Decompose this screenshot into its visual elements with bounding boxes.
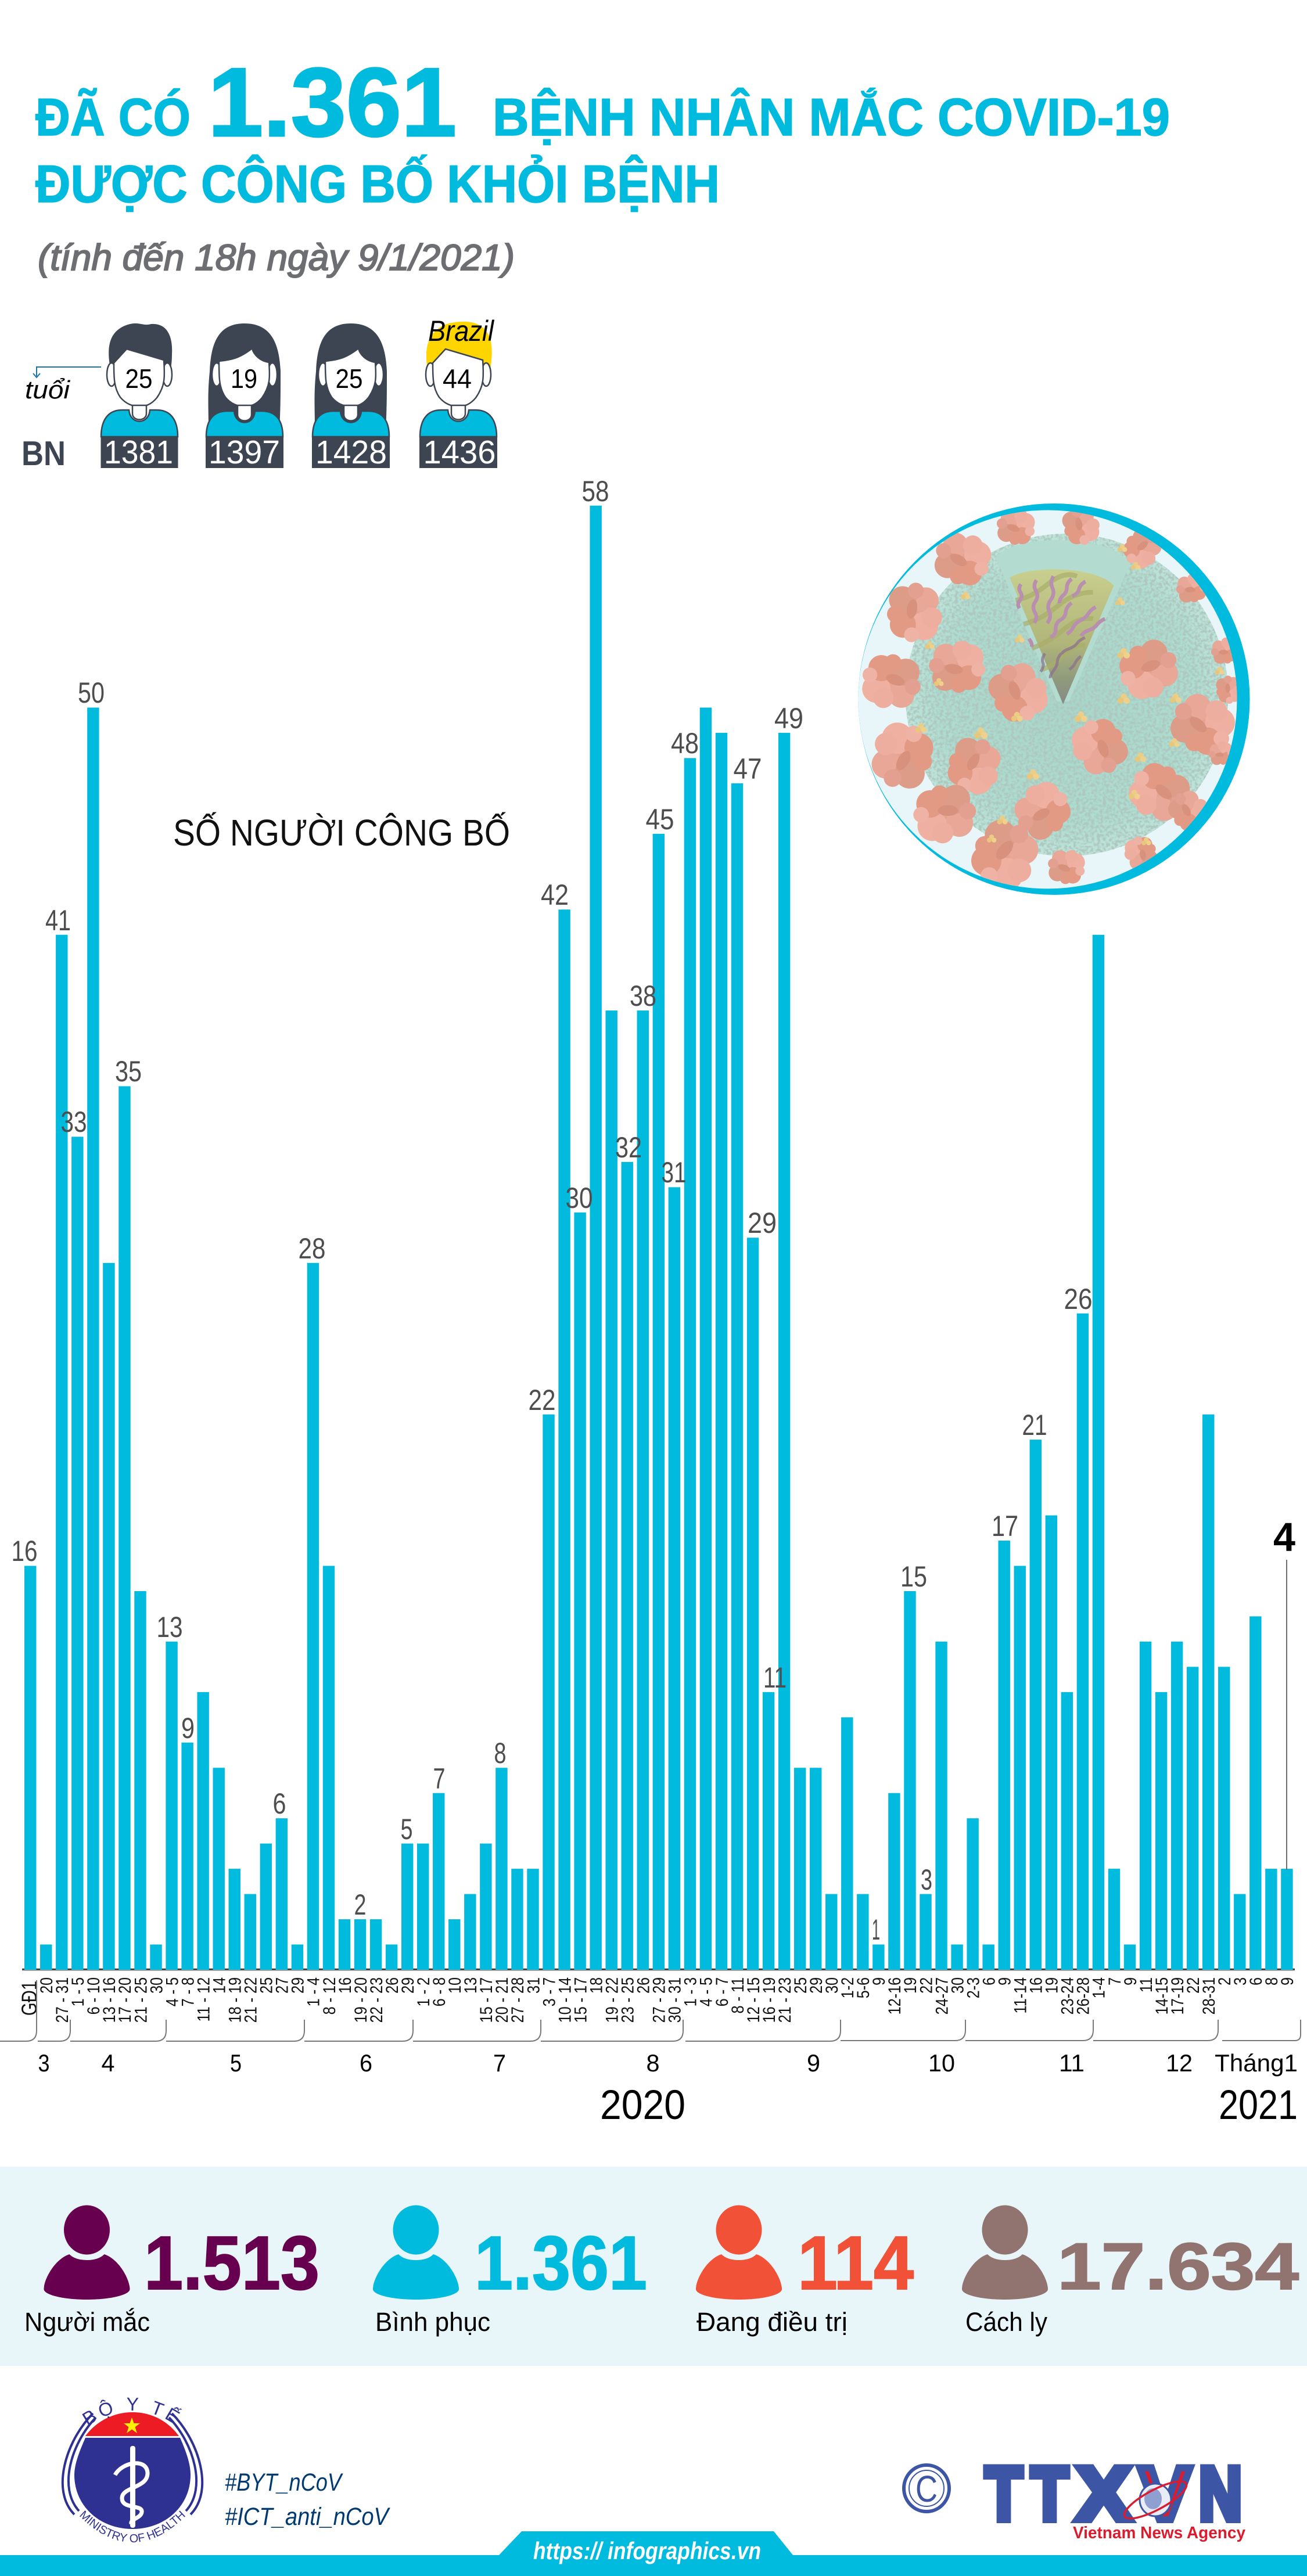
date tick labels: GĐ1 — [18, 1981, 42, 2016]
patient 1428: 25 — [336, 364, 362, 394]
month labels: 12 — [1166, 2049, 1193, 2077]
logo: TTXVN: T — [985, 2451, 1022, 2536]
logo: Bộ Y tế: MINISTRY OF HEALTH — [80, 2510, 185, 2542]
chart heading: SỐ NGƯỜI CÔNG BỐ — [173, 812, 510, 854]
hashtags: #BYT_nCoV — [225, 2469, 344, 2496]
date tick labels: 24-27 — [932, 1977, 951, 2014]
date tick labels: 21 - 22 — [241, 1977, 260, 2023]
date tick labels: 14-15 — [1152, 1977, 1171, 2014]
value labels: 31 — [661, 1156, 687, 1189]
stat: đang điều trị: 114 — [798, 2220, 914, 2305]
label: tuổi with arrow: tuổi — [25, 376, 70, 404]
date tick labels: 30 — [146, 1977, 166, 1994]
month labels: 10 — [928, 2049, 955, 2077]
date tick labels: 21 - 23 — [775, 1977, 794, 2023]
stat: bình phục: 1.361 — [475, 2220, 647, 2305]
date tick labels: 19 - 22 — [602, 1977, 622, 2023]
date tick labels: 26-28 — [1073, 1977, 1093, 2014]
month labels: 11 — [1059, 2049, 1085, 2077]
value labels: 33 — [60, 1106, 87, 1138]
date tick labels: 6 - 10 — [84, 1977, 103, 2014]
month labels: 7 — [493, 2049, 506, 2077]
date tick labels: 22 — [1183, 1977, 1202, 1994]
patient 1381: 25 — [125, 364, 152, 394]
date tick labels: 27 - 31 — [52, 1977, 72, 2023]
date tick labels: 8 - 12 — [319, 1977, 339, 2014]
bar chart — [0, 475, 1301, 2128]
value labels: 28 — [299, 1232, 325, 1265]
virus illustration — [854, 503, 1250, 902]
month labels: 4 — [101, 2049, 115, 2077]
date tick labels — [18, 1977, 1297, 2023]
logo: TTXVN — [985, 2451, 1245, 2542]
value labels: 50 — [78, 677, 105, 709]
date tick labels: 26 — [382, 1977, 401, 1994]
date tick labels: 31 — [523, 1977, 543, 1994]
value labels: 32 — [615, 1131, 642, 1164]
month labels: 3 — [38, 2049, 50, 2077]
date tick labels: 6 — [1246, 1977, 1266, 1985]
date tick labels: 16 - 19 — [759, 1977, 778, 2023]
date tick labels: 29 — [398, 1977, 417, 1994]
date tick labels: 22 — [916, 1977, 936, 1994]
value labels: 58 — [582, 475, 609, 508]
logo: TTXVN: Vietnam News Agency — [1073, 2524, 1245, 2542]
date tick labels: 6 - 7 — [712, 1977, 731, 2006]
callout: latest value 4: 4 — [1273, 1514, 1295, 1560]
bars — [24, 506, 1293, 1970]
date tick labels: 3 - 7 — [539, 1977, 559, 2006]
value labels: 11 — [763, 1661, 787, 1694]
value labels: 13 — [157, 1611, 182, 1643]
date tick labels: 21 - 25 — [131, 1977, 150, 2023]
stat: đang điều trị — [696, 2206, 914, 2337]
value labels: 16 — [12, 1535, 37, 1567]
stat: đang điều trị: Đang điều trị — [696, 2307, 848, 2337]
value labels: 48 — [671, 727, 699, 760]
logo: Bộ Y tế: BỘ Y TẾ — [82, 2397, 182, 2425]
value labels: 5 — [401, 1813, 412, 1845]
date tick labels: 29 — [288, 1977, 307, 1994]
date tick labels: 1 - 3 — [681, 1977, 700, 2006]
value labels: 45 — [646, 803, 674, 836]
title: ĐƯỢC CÔNG BỐ KHỎI BỆNH — [35, 154, 720, 214]
patient 1436: 1436 — [423, 434, 496, 471]
date tick labels: 19 - 20 — [351, 1977, 370, 2023]
date tick labels: 29 — [806, 1977, 825, 1994]
date tick labels: 2 — [1215, 1977, 1234, 1985]
date tick labels: 10 - 14 — [555, 1977, 574, 2023]
date tick labels: 1-4 — [1089, 1977, 1108, 1998]
value labels: 29 — [748, 1207, 777, 1239]
month labels: 5 — [230, 2049, 242, 2077]
title: 1.361 — [208, 48, 457, 157]
date tick labels: 15 - 17 — [476, 1977, 496, 2023]
value labels: 2 — [354, 1888, 366, 1921]
date tick labels: 16 — [335, 1977, 354, 1994]
title: ĐÃ CÓ — [35, 88, 191, 147]
month labels — [38, 2049, 1298, 2077]
patient 1397: 1397 — [209, 434, 280, 471]
date tick labels: 28-31 — [1199, 1977, 1218, 2014]
label: tuổi with arrow — [25, 367, 101, 404]
date tick labels: 13 - 16 — [99, 1977, 119, 2023]
date tick labels: 26 — [634, 1977, 653, 1994]
value labels — [12, 475, 1092, 1946]
date tick labels: 13 — [461, 1977, 480, 1994]
date tick labels: 1-2 — [838, 1977, 857, 1998]
value labels: 38 — [630, 980, 656, 1012]
date tick labels: 11 - 12 — [193, 1977, 213, 2022]
stat: cách ly: 17.634 — [1057, 2230, 1299, 2304]
subtitle: date note: (tính đến 18h ngày 9/1/2021) — [38, 238, 515, 278]
patient 1381 — [101, 323, 178, 471]
value labels: 47 — [733, 753, 762, 785]
date tick labels: 16 — [1026, 1977, 1046, 1994]
month labels: Tháng1 — [1215, 2049, 1298, 2077]
date tick labels: 15 - 17 — [570, 1977, 590, 2023]
stat: bình phục: Bình phục — [375, 2307, 490, 2337]
stat: cách ly: Cách ly — [965, 2307, 1047, 2337]
patient 1436: Brazil — [428, 315, 495, 347]
value labels: 3 — [921, 1863, 932, 1896]
date tick labels: 23-24 — [1058, 1977, 1077, 2014]
date tick labels: 20 - 21 — [492, 1977, 512, 2023]
value labels: 49 — [774, 702, 803, 735]
date tick labels: 4 - 5 — [162, 1977, 182, 2006]
patient 1381: 1381 — [104, 434, 173, 471]
date tick labels: 1 - 5 — [68, 1977, 88, 2006]
date tick labels: 25 — [791, 1977, 810, 1994]
hashtags: #ICT_anti_nCoV — [225, 2503, 391, 2531]
date tick labels: 20 — [37, 1977, 56, 1994]
patient 1397: 19 — [231, 364, 257, 394]
date tick labels: 9 — [1277, 1977, 1297, 1985]
date tick labels: 1 - 4 — [304, 1977, 323, 2006]
date tick labels: 27 - 29 — [649, 1977, 669, 2023]
date tick labels: 27 — [272, 1977, 292, 1994]
date tick labels: 30 — [947, 1977, 967, 1994]
value labels: 26 — [1064, 1283, 1092, 1315]
date tick labels: 18 — [586, 1977, 606, 1994]
month labels: 8 — [646, 2049, 660, 2077]
stat: cách ly — [962, 2206, 1299, 2337]
value labels: 7 — [433, 1762, 445, 1795]
patient 1428 — [312, 323, 390, 471]
date tick labels: 23 - 25 — [617, 1977, 637, 2023]
date tick labels: 14 — [209, 1977, 229, 1994]
date tick labels: 19 — [1042, 1977, 1061, 1994]
date tick labels: 7 — [1105, 1977, 1124, 1985]
date tick labels: 9 — [869, 1977, 889, 1985]
date tick labels: 4 - 5 — [696, 1977, 716, 2006]
value labels: 30 — [566, 1182, 593, 1214]
date tick labels: 8 - 11 — [728, 1977, 747, 2014]
date tick labels: 2-3 — [963, 1977, 983, 1998]
value labels: 35 — [115, 1055, 142, 1088]
date tick labels: 17-19 — [1168, 1977, 1187, 2014]
date tick labels: 9 — [1121, 1977, 1140, 1985]
value labels: 8 — [494, 1737, 507, 1769]
month brackets — [0, 1980, 1301, 2041]
hashtags — [225, 2469, 391, 2531]
patient 1397 — [206, 323, 283, 471]
stat: bình phục — [373, 2206, 647, 2337]
date tick labels: 10 — [445, 1977, 465, 1994]
value labels: 22 — [529, 1384, 555, 1416]
footer bar with url tab — [0, 2531, 1307, 2576]
copyright mark: C — [915, 2468, 938, 2510]
logo: Bộ Y tế — [62, 2397, 203, 2542]
value labels: 15 — [900, 1560, 927, 1593]
value labels: 17 — [992, 1510, 1018, 1542]
date tick labels: 1 - 2 — [414, 1977, 433, 2006]
stat: người mắc — [24, 2206, 319, 2337]
date tick labels: 12-16 — [885, 1977, 904, 2014]
logo: TTXVN: V — [1139, 2451, 1191, 2536]
date tick labels: 30 - 31 — [665, 1977, 684, 2023]
footer bar with url tab: https:// infographics.vn — [533, 2537, 761, 2564]
logo: TTXVN: T — [1031, 2451, 1068, 2536]
date tick labels: 18 - 19 — [225, 1977, 245, 2023]
date tick labels: 6 - 8 — [429, 1977, 448, 2006]
date tick labels: 27 - 28 — [508, 1977, 527, 2023]
month labels: 9 — [807, 2049, 820, 2077]
date tick labels: 7 - 8 — [178, 1977, 198, 2006]
value labels: 42 — [541, 879, 569, 911]
year label 2020: 2020 — [600, 2082, 685, 2128]
patient 1428: 1428 — [315, 434, 387, 471]
patient 1436: 44 — [443, 364, 472, 394]
date tick labels: 5-6 — [853, 1977, 873, 1998]
date tick labels: 6 — [979, 1977, 999, 1985]
date tick labels: 17 - 20 — [115, 1977, 135, 2023]
date tick labels: 25 — [257, 1977, 276, 1994]
patient 1436 — [419, 315, 497, 471]
date tick labels: 19 — [900, 1977, 920, 1994]
copyright mark — [904, 2465, 949, 2512]
panel: totals — [0, 2167, 1307, 2366]
stat: người mắc: Người mắc — [24, 2307, 150, 2337]
date tick labels: 8 — [1262, 1977, 1281, 1985]
date tick labels: 12 - 15 — [744, 1977, 763, 2023]
date tick labels: 11 — [1136, 1977, 1155, 1992]
logo: TTXVN: X — [1076, 2451, 1131, 2536]
date tick labels: 30 — [822, 1977, 841, 1994]
title: BỆNH NHÂN MẮC COVID-19 — [493, 88, 1170, 147]
patients row — [21, 315, 497, 473]
stat: người mắc: 1.513 — [144, 2220, 319, 2305]
value labels: 6 — [273, 1787, 286, 1820]
title — [35, 48, 1170, 214]
value labels: 1 — [872, 1913, 880, 1946]
value labels: 41 — [45, 904, 71, 937]
value labels: 21 — [1022, 1409, 1047, 1441]
date tick labels: 9 — [994, 1977, 1014, 1985]
month labels: 6 — [360, 2049, 372, 2077]
date tick labels: 3 — [1230, 1977, 1250, 1985]
logo: TTXVN: N — [1199, 2451, 1242, 2536]
date tick labels: 11-14 — [1010, 1977, 1030, 2014]
value labels: 9 — [181, 1712, 195, 1744]
label: BN: BN — [21, 434, 66, 473]
date tick labels: 22 - 23 — [367, 1977, 386, 2023]
